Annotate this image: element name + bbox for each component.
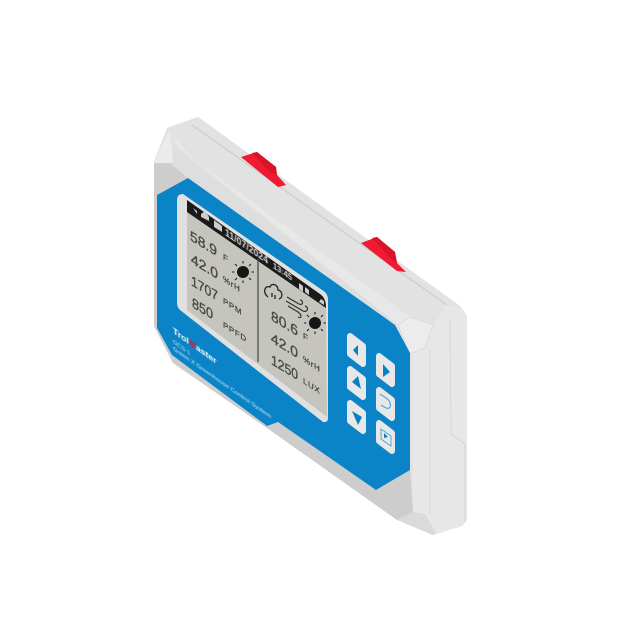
left readings: 1707	[191, 273, 218, 305]
right readings	[271, 308, 298, 384]
red clip: left	[241, 152, 286, 187]
icon: rain cloud	[265, 284, 282, 299]
left readings	[190, 228, 218, 323]
right units: %rH	[303, 354, 320, 374]
top face	[167, 117, 460, 325]
icon: sun right	[304, 312, 326, 334]
status battery	[299, 283, 324, 305]
left units: PPFD	[223, 320, 247, 344]
button: left	[350, 336, 363, 364]
time: 13:45	[273, 260, 292, 283]
left units: F	[223, 252, 228, 264]
right readings: 1250	[271, 352, 298, 384]
red clip: right	[361, 237, 406, 272]
divider	[257, 259, 259, 362]
left readings: 42.0	[191, 251, 218, 283]
button: back	[379, 390, 392, 418]
keypad	[350, 336, 392, 451]
screen frame	[177, 194, 328, 422]
right side strips	[412, 306, 467, 535]
right units: LUX	[303, 376, 320, 396]
right units	[303, 331, 320, 396]
lower left bevel	[154, 163, 413, 520]
button: right	[379, 356, 392, 384]
right units: F	[303, 331, 308, 343]
button: menu	[379, 423, 392, 451]
right readings: 42.0	[271, 330, 298, 362]
product description: Green X Greenhouse Control System	[173, 346, 271, 421]
brand logo: TrolMaster	[173, 326, 217, 367]
left units: %rH	[223, 274, 240, 294]
icon: wind	[286, 297, 307, 318]
device body	[154, 117, 467, 535]
right readings: 80.6	[271, 308, 298, 340]
corner facet: top right	[398, 317, 433, 354]
LCD screen	[187, 200, 327, 417]
button: down	[350, 403, 363, 431]
left readings: 850	[192, 295, 213, 323]
left units	[223, 252, 247, 344]
status icons	[193, 208, 222, 232]
blue front panel	[157, 178, 410, 490]
left units: PPM	[223, 296, 242, 317]
button: up	[350, 369, 363, 397]
model name: GCS-1	[173, 339, 191, 357]
corner facet: top left	[154, 130, 173, 167]
date: 11/07/2024	[225, 227, 269, 267]
icon: sun left	[232, 261, 254, 283]
corner facet: bottom right	[397, 512, 436, 535]
left readings: 58.9	[190, 228, 217, 260]
status bar	[187, 200, 326, 308]
